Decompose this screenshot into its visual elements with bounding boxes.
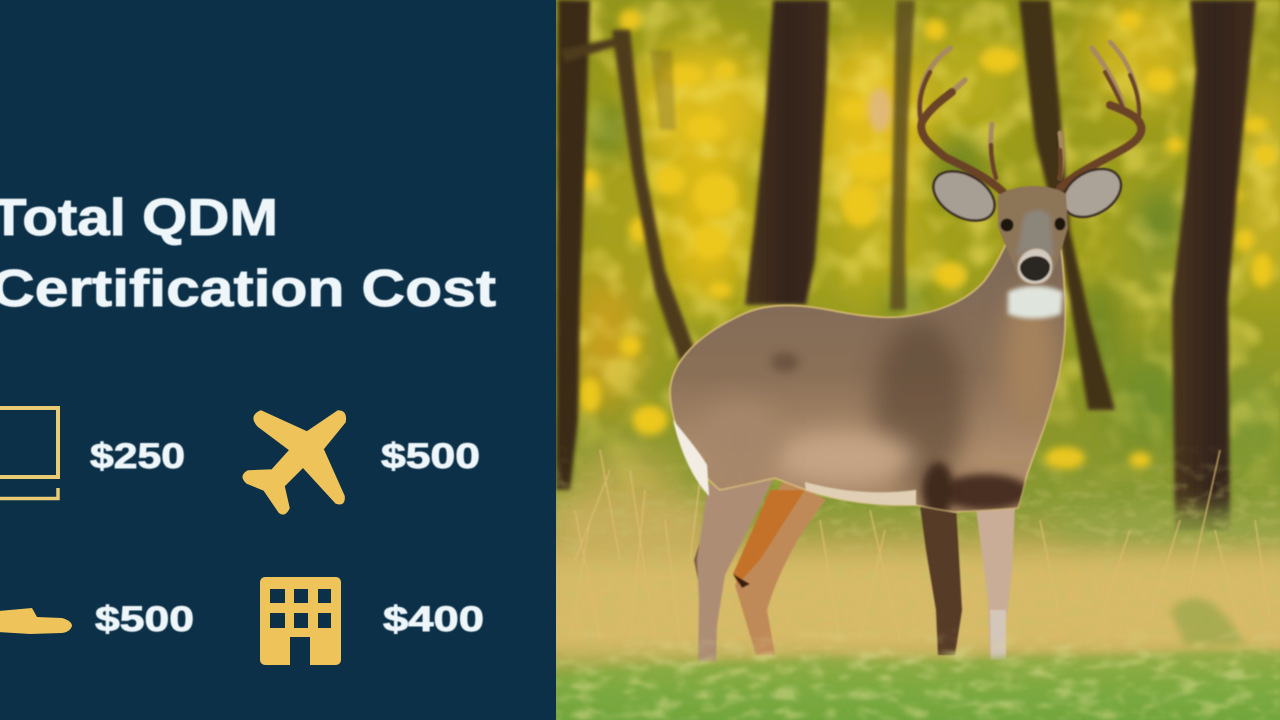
title: Total QDM Certification Cost: Certification Cost [0, 260, 496, 318]
deer rear leg [697, 470, 778, 662]
cost: lower left $500: $500 [95, 600, 194, 639]
photo: deer in autumn forest [540, 0, 1280, 720]
deer throat patch [1008, 286, 1063, 318]
deer ears [931, 166, 1124, 223]
cost: hotel $400: $400 [383, 600, 484, 639]
photo: forest background [556, 0, 1280, 720]
icon: laptop [0, 408, 58, 498]
deer tail [673, 420, 709, 496]
photo: front grass [556, 634, 1280, 720]
photo: tree trunks [556, 0, 1256, 530]
title: Total QDM Certification Cost [0, 189, 496, 318]
icon: airplane [243, 411, 345, 514]
icon: hotel building [260, 577, 341, 665]
deer front legs [918, 490, 1015, 660]
illustration: white-tailed deer [670, 42, 1141, 662]
panel: navy cost panel [0, 0, 556, 720]
deer antlers [920, 42, 1141, 192]
cost: laptop $250: $250 [90, 437, 185, 476]
deer torso [670, 232, 1065, 518]
cost: airplane $500: $500 [381, 437, 480, 476]
deer head [998, 186, 1068, 286]
icon: cut-off tag shape [0, 608, 72, 634]
deer far legs [694, 478, 826, 655]
photo: grass meadow [540, 440, 1280, 670]
